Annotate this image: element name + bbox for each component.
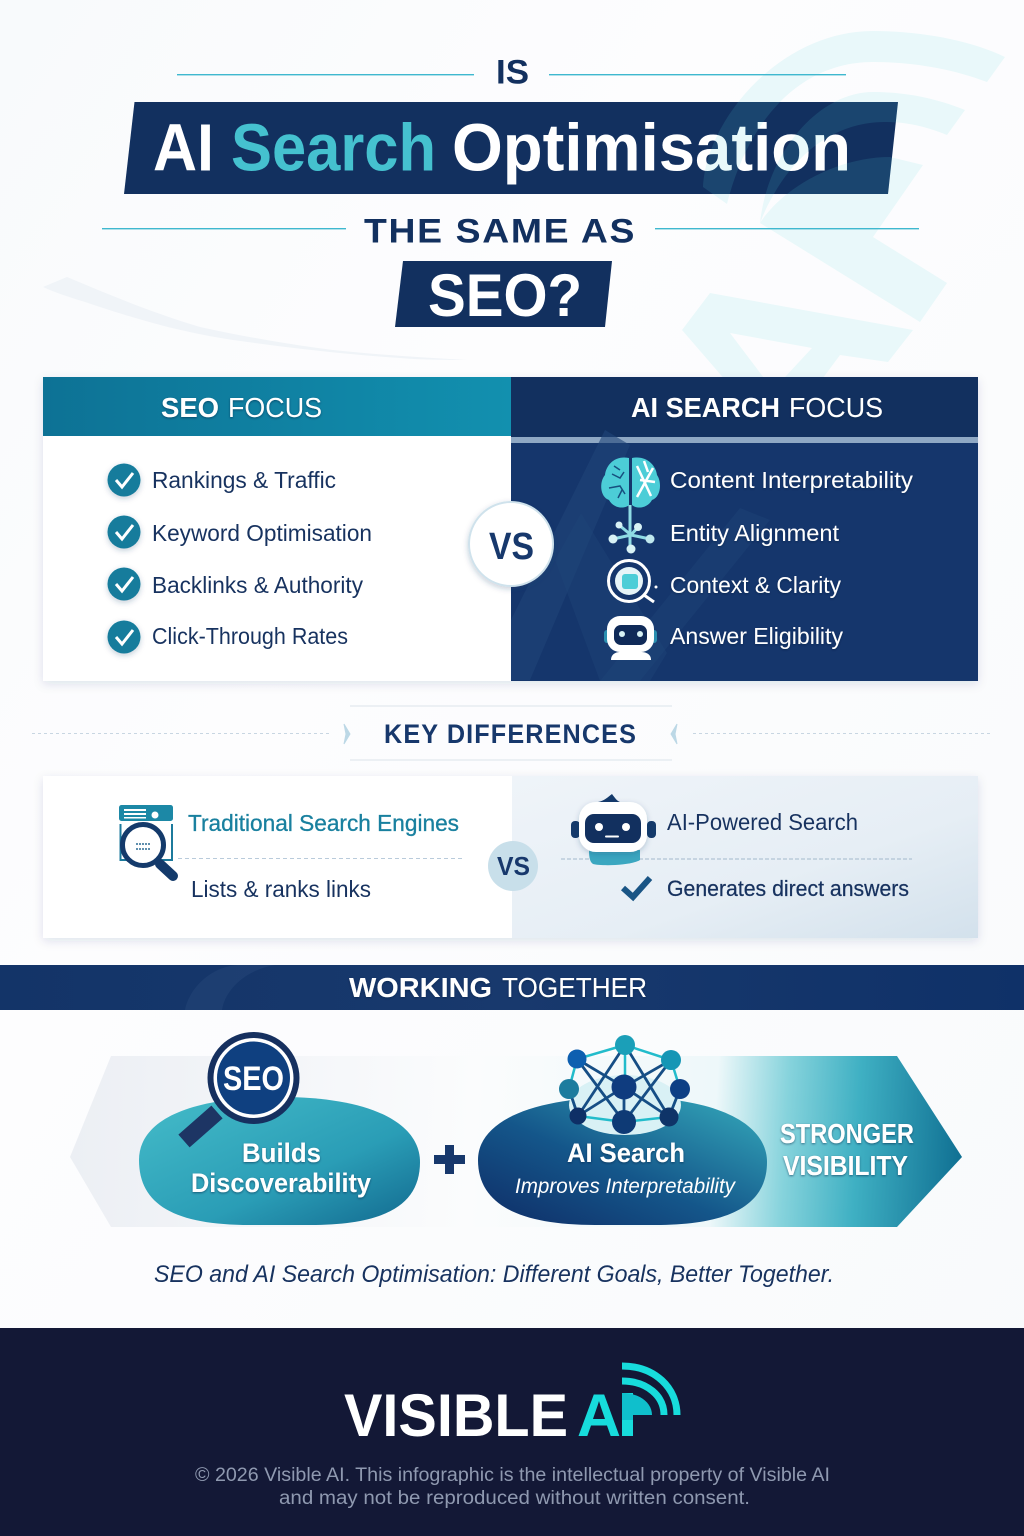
text: stronger visibility [780,1118,914,1181]
icon: entity nodes [608,505,654,554]
title banner: AI Search Optimisation: Search [231,110,436,186]
blob: AI search: AI Search [567,1138,685,1168]
title line: IS: IS [496,54,529,92]
icon: context magnifier [608,560,658,602]
title banner: SEO?: SEO? [428,262,582,329]
text: Lists & ranks links: Lists & ranks links [191,876,371,902]
text: Answer Eligibility: Answer Eligibility [670,623,843,649]
blob: AI search [478,1075,767,1225]
list: SEO focus items [108,464,372,654]
VS badge [469,502,553,586]
blob: builds discoverability: Builds [242,1138,321,1168]
header: AI search focus [631,392,883,423]
footer [0,1328,1024,1536]
item: Keyword Optimisation: Keyword Optimisation [152,520,372,546]
heading band: working together: TOGETHER [502,972,647,1003]
title banner: AI Search Optimisation [124,102,898,194]
icon: plus [434,1145,465,1174]
heading: key differences: KEY DIFFERENCES [384,719,637,749]
VS badge small [488,841,538,891]
text: stronger visibility: VISIBILITY [783,1150,908,1181]
copyright text: and may not be reproduced without written consent. [279,1488,750,1509]
panel: AI search focus background [511,377,978,681]
icon: robot [604,616,657,660]
item: Click-Through Rates [108,620,348,654]
tagline: SEO and AI Search Optimisation: Different Goals, Better Together. [154,1261,834,1288]
VS badge: VS [489,526,534,568]
title banner: AI Search Optimisation: AI [153,110,214,186]
logo: Visible AI: VISIBLE [344,1382,568,1449]
text: Content Interpretability: Content Interpretability [670,467,914,493]
item: Backlinks & Authority: Backlinks & Authority [152,572,363,598]
icon: SEO magnifier [184,1032,300,1141]
header: AI search focus: AI SEARCH [631,392,780,423]
icon: neural network [559,1035,690,1134]
list: AI search focus items [601,457,914,660]
heading band: working together: WORKING [349,972,492,1003]
header: SEO focus [43,377,511,436]
item: Rankings & Traffic: Rankings & Traffic [152,467,336,493]
panel: key differences comparison [43,776,978,938]
text: Entity Alignment: Entity Alignment [670,520,840,546]
copyright text [195,1465,830,1509]
background swoosh [43,277,467,360]
text: Generates direct answers: Generates direct answers [667,876,909,901]
title line: THE SAME AS: THE SAME AS [364,212,636,250]
blob: builds discoverability [139,1097,420,1225]
icon: search engine magnifier [119,805,173,876]
header: SEO focus: SEO [161,392,219,423]
item: Keyword Optimisation [108,516,372,548]
logo: Visible AI [344,1366,677,1449]
item: Click-Through Rates: Click-Through Rates [152,623,348,649]
title [102,60,919,327]
item: Backlinks & Authority [108,568,363,600]
icon: robot large [571,794,656,865]
text: Traditional Search Engines: Traditional Search Engines [188,810,459,836]
arrow band [70,1056,962,1227]
logo: Visible AI: A [577,1382,621,1449]
diagram: SEO plus AI search equals stronger visibility [70,1032,962,1227]
text: AI-Powered Search: AI-Powered Search [667,809,858,835]
icon: check mark [623,878,650,897]
text: stronger visibility: STRONGER [780,1118,914,1149]
panel: SEO focus vs AI search focus [43,377,978,681]
header: SEO focus: FOCUS [228,392,322,423]
icon: brain [601,457,660,508]
heading band: working together [0,965,1024,1010]
text: Context & Clarity: Context & Clarity [670,572,841,598]
background watermark: signal arcs and letter A [682,31,1005,440]
copyright text: © 2026 Visible AI. This infographic is the intellectual property of Visible AI [195,1465,830,1486]
item: Rankings & Traffic [108,464,336,496]
VS badge small: VS [497,851,530,881]
title banner: AI Search Optimisation: Optimisation [452,110,851,186]
icon: SEO magnifier: SEO [223,1060,284,1098]
heading: key differences [32,706,991,760]
header: AI search focus: FOCUS [789,392,883,423]
blob: AI search: Improves Interpretability [515,1175,736,1198]
blob: builds discoverability: Discoverability [191,1168,371,1198]
